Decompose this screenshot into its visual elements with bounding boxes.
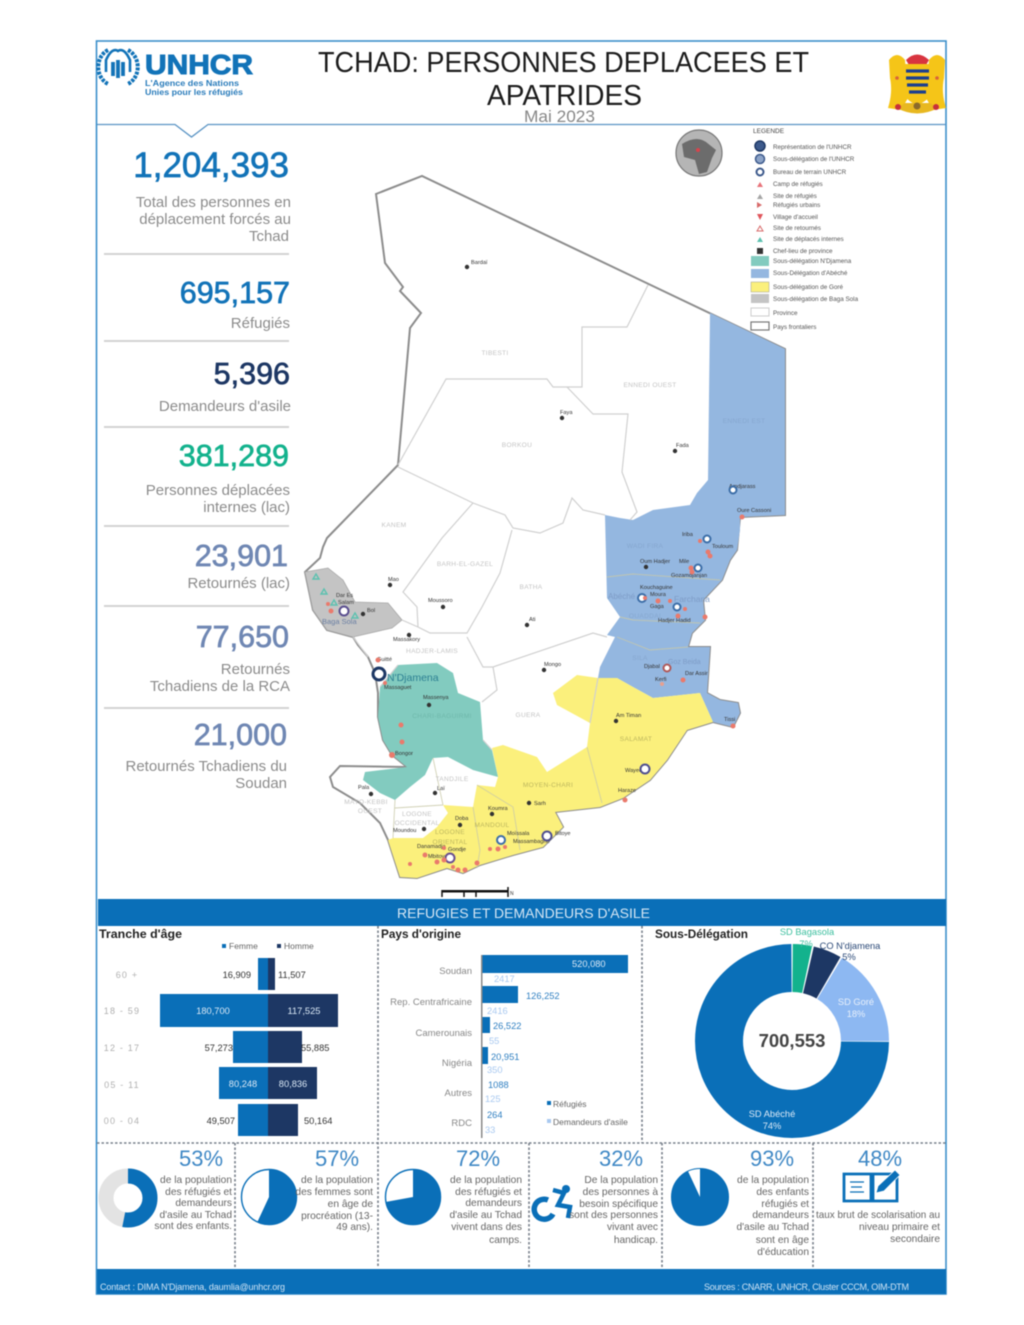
towns: Ati — [529, 617, 536, 623]
figure: refugees: Réfugiés — [231, 315, 290, 332]
text: camps: demandeurs — [465, 1198, 522, 1209]
origin labels: Camerounais — [416, 1028, 472, 1039]
figure: returnees CAR — [150, 620, 290, 695]
towns: Mao — [388, 577, 399, 583]
pyramid values: 16,909 — [223, 970, 251, 980]
text: camps: d'asile au Tchad — [449, 1210, 522, 1221]
pyramid bars: femme — [160, 958, 268, 1136]
origin values: 520,080 — [572, 959, 606, 969]
figure: returnees Sudan: 21,000 — [194, 718, 287, 752]
text: camps: des réfugiés et — [455, 1187, 522, 1198]
logo: UNHCR: UNHCR — [145, 49, 253, 80]
panel: key figures — [104, 146, 291, 792]
origin values: 26,522 — [493, 1021, 521, 1031]
figure: returnees CAR: Retournés — [221, 661, 290, 678]
origin values: 55 — [489, 1036, 499, 1046]
figure: returnees lake: 23,901 — [195, 539, 288, 573]
text: camps: de la population — [450, 1175, 522, 1186]
map of Chad — [305, 176, 785, 897]
legend labels: Sous-délégation N'Djamena — [773, 258, 852, 265]
region: Sous-délégation Baga Sola (grey) — [305, 568, 402, 637]
origin values — [485, 959, 606, 1135]
region labels: MAYO-KEBBI — [344, 799, 388, 806]
icon: book and pencil — [844, 1170, 900, 1201]
legend labels: Chef-lieu de province — [773, 248, 833, 255]
pyramid age labels — [104, 970, 140, 1126]
figure: IDPs: internes (lac) — [203, 499, 290, 516]
label: Goz Beida: Goz Beida — [668, 659, 701, 666]
donut labels: SD Bagasola — [780, 927, 835, 937]
origin labels — [390, 966, 473, 1129]
towns: Bol — [367, 608, 375, 614]
panel: disability — [534, 1146, 658, 1246]
text: children: des réfugiés et — [165, 1187, 232, 1198]
legend labels: Site de retournés — [773, 225, 821, 232]
towns: Tissi — [724, 717, 735, 723]
origin values: 33 — [485, 1125, 495, 1135]
origin labels: RDC — [451, 1118, 472, 1129]
towns: Hadjer Hadid — [658, 618, 691, 624]
region labels: ENNEDI OUEST — [623, 382, 677, 389]
legend labels: Sous-délégation de Baga Sola — [773, 296, 859, 303]
origin values: 264 — [487, 1110, 503, 1120]
title — [318, 47, 809, 112]
figure: returnees Sudan: Retournés Tchadiens du — [126, 758, 287, 775]
scale bar: N — [510, 891, 514, 897]
pyramid values: 49,507 — [207, 1116, 235, 1126]
origin labels: Autres — [445, 1088, 472, 1099]
pyramid values: 55,885 — [301, 1043, 329, 1053]
text: disability: De la population — [584, 1175, 658, 1186]
region: Sous-délégation N'Djamena (green) — [363, 663, 498, 800]
text: children: de la population — [160, 1175, 232, 1186]
figure: returnees Sudan: Soudan — [235, 775, 287, 792]
figure: returnees Sudan — [126, 718, 287, 792]
region labels: BATHA — [520, 584, 543, 591]
pyramid values: 180,700 — [196, 1006, 230, 1016]
region labels: BARH-EL-GAZEL — [437, 561, 493, 568]
contact: Contact : DIMA N'Djamena, daumlia@unhcr.org — [100, 1282, 285, 1292]
legend symbols — [751, 141, 769, 330]
date: Mai 2023 — [524, 108, 595, 126]
panel: school age — [672, 1146, 809, 1258]
towns: Gaga — [650, 604, 665, 610]
text: disability: des personnes à — [583, 1187, 658, 1198]
title: TCHAD: PERSONNES DEPLACEES ET — [318, 47, 809, 79]
legend labels: Représentation de l'UNHCR — [773, 144, 852, 151]
text: children: d'asile au Tchad — [159, 1210, 232, 1221]
text: children: sont des enfants. — [154, 1221, 232, 1232]
text: women: des femmes sont — [295, 1187, 373, 1198]
text: camps: vivent dans des — [451, 1222, 522, 1233]
label: Farchana: Farchana — [674, 594, 710, 604]
pyramid values: 57,273 — [205, 1043, 233, 1053]
towns: Laï — [437, 786, 445, 792]
header — [97, 47, 946, 137]
origin labels: Rep. Centrafricaine — [390, 997, 472, 1008]
origin legend: Réfugiés — [553, 1099, 587, 1109]
pyramid age labels: 60 + — [116, 970, 138, 980]
chart: country of origin — [381, 929, 628, 1138]
origin values: 125 — [485, 1094, 501, 1104]
text: enrolment: niveau primaire et — [859, 1222, 940, 1233]
icon: coat of arms of Chad — [888, 54, 946, 114]
origin labels: Nigéria — [442, 1058, 473, 1069]
text: women: procréation (13- — [301, 1211, 373, 1222]
towns: Danamadja — [417, 844, 446, 850]
pyramid values: 80,248 — [229, 1079, 257, 1089]
region: Sous-délégation d'Abéché (blue) — [598, 313, 785, 727]
region labels: SALAMAT — [620, 736, 652, 743]
towns: Am Timan — [616, 713, 641, 719]
origin labels: Soudan — [439, 966, 472, 977]
figure: IDPs: 381,289 — [179, 439, 289, 473]
towns: Sarh — [534, 801, 546, 807]
region labels: ENNEDI EST — [723, 418, 765, 425]
towns: Massaguet — [384, 685, 412, 691]
origin legend: Demandeurs d'asile — [553, 1117, 628, 1127]
legend: LEGENDE — [753, 128, 785, 135]
towns: Faya — [560, 410, 573, 416]
donut total: 700,553 — [759, 1030, 825, 1051]
towns: Moïssala — [507, 831, 530, 837]
towns: Dar Es — [336, 593, 353, 599]
figure: total: Total des personnes en — [136, 194, 291, 211]
pyramid age labels: 12 - 17 — [104, 1043, 140, 1053]
icon: pie 72% — [386, 1169, 441, 1225]
towns: Oure Cassoni — [737, 508, 771, 514]
towns: Moussoro — [428, 598, 453, 604]
towns: Djabal — [644, 664, 660, 670]
donut labels: 74% — [763, 1121, 781, 1131]
footer — [97, 1269, 946, 1294]
logo: UNHCR: Unies pour les réfugiés — [145, 87, 243, 97]
text: school age: de la population — [737, 1175, 809, 1186]
pyramid values: 117,525 — [288, 1006, 320, 1016]
figure: returnees CAR: Tchadiens de la RCA — [150, 678, 290, 695]
towns: Massambagne — [513, 839, 550, 845]
region labels: SILA — [632, 655, 648, 662]
towns: Bongor — [395, 751, 413, 757]
text: school age: d'éducation — [757, 1247, 809, 1258]
icon: pie 57% — [242, 1169, 297, 1225]
figure: asylum seekers: 5,396 — [214, 357, 290, 391]
towns: Wayed — [625, 768, 642, 774]
region labels: BORKOU — [502, 442, 532, 449]
panel: women of reproductive age — [242, 1146, 373, 1233]
towns: Doba — [455, 816, 469, 822]
panel: disability: 32% — [599, 1146, 643, 1171]
legend labels: Réfugiés urbains — [773, 202, 820, 209]
pyramid values: 80,836 — [279, 1079, 307, 1089]
towns: Pala — [358, 785, 370, 791]
text: school age: d'asile au Tchad — [736, 1222, 809, 1233]
figure: returnees CAR: 77,650 — [196, 620, 289, 654]
donut labels: SD Abéché — [749, 1109, 795, 1119]
text: disability: vivant avec — [607, 1222, 658, 1233]
text: disability: handicap. — [614, 1235, 658, 1246]
region labels: TIBESTI — [481, 350, 509, 357]
towns: Bitoye — [555, 831, 571, 837]
towns: Moura — [650, 592, 667, 598]
donut labels: CO N'djamena — [820, 941, 881, 951]
section band: REFUGIES ET DEMANDEURS D'ASILE — [397, 906, 650, 921]
region: Sous-délégation de Goré (yellow) — [388, 675, 713, 878]
text: women: 49 ans). — [336, 1222, 373, 1233]
figure: IDPs — [146, 439, 290, 516]
figure: returnees lake — [187, 539, 290, 592]
figure: asylum seekers — [159, 357, 291, 415]
towns: Kerfi — [655, 677, 667, 683]
text: disability: sont des personnes — [569, 1210, 658, 1221]
region labels: WADI FIRA — [627, 543, 664, 550]
origin legend — [547, 1099, 628, 1127]
text: enrolment — [816, 1210, 940, 1245]
panel: women of reproductive age: 57% — [315, 1146, 359, 1171]
page frame — [96, 41, 946, 1294]
inset: locator globe — [676, 130, 722, 176]
region labels: OUADDAI — [629, 613, 661, 620]
figure: refugees — [180, 276, 290, 332]
region labels: LOGONE — [402, 811, 432, 818]
towns: Massakory — [393, 637, 420, 643]
text: enrolment: secondaire — [890, 1234, 940, 1245]
region labels: TANDJILE — [435, 776, 469, 783]
text: disability — [569, 1175, 658, 1246]
donut labels: SD Goré — [838, 997, 874, 1007]
pyramid legend: Femme — [229, 941, 258, 951]
title: APATRIDES — [487, 80, 642, 112]
chart: age pyramid — [99, 929, 338, 1136]
panel: living in camps — [386, 1146, 522, 1246]
label: Abéché office: Abéché — [608, 592, 636, 601]
country base — [305, 176, 785, 878]
region labels: GUERA — [516, 712, 541, 719]
figure: total: Tchad — [249, 228, 289, 245]
pyramid values: 50,164 — [304, 1116, 332, 1126]
origin values: 350 — [487, 1065, 503, 1075]
figure: returnees lake: Retournés (lac) — [187, 575, 290, 592]
legend — [751, 128, 859, 331]
panel: school age: 93% — [750, 1146, 794, 1171]
text: school age: sont en âge — [756, 1235, 809, 1246]
origin values: 2416 — [487, 1006, 508, 1016]
text: school age: des enfants — [756, 1187, 809, 1198]
region labels: MANDOUL — [474, 822, 510, 829]
text: women: de la population — [301, 1175, 373, 1186]
legend labels: Sous-Délégation d'Abéché — [773, 270, 848, 277]
legend labels: Site de déplacés internes — [773, 236, 844, 243]
panel: children — [106, 1146, 232, 1232]
towns: Dar Assir — [685, 671, 708, 677]
towns: Amdjarass — [729, 484, 756, 490]
origin values: 20,951 — [491, 1052, 519, 1062]
donut labels: 5% — [842, 952, 856, 962]
text: disability: besoin spécifique — [579, 1199, 658, 1210]
donut labels — [749, 927, 881, 1131]
towns: Touloum — [712, 544, 733, 550]
legend labels: Pays frontaliers — [773, 324, 816, 331]
towns: Mbitoye — [428, 854, 448, 860]
text: school age: réfugiés et — [761, 1199, 809, 1210]
towns: Bardaï — [471, 260, 488, 266]
towns: Koumra — [488, 806, 508, 812]
panel: children: 53% — [179, 1146, 223, 1171]
donut ring — [719, 968, 865, 1114]
towns: Oum Hadjer — [640, 559, 670, 565]
region labels — [344, 350, 765, 846]
legend labels: Site de réfugiés — [773, 193, 817, 200]
logo: UNHCR — [98, 49, 253, 97]
towns: Gozamdjanjan — [671, 573, 707, 579]
text: children: demandeurs — [175, 1198, 232, 1209]
text: school age — [736, 1175, 809, 1258]
origin values: 1088 — [488, 1080, 509, 1090]
figure: total: 1,204,393 — [133, 146, 289, 185]
text: camps — [449, 1175, 522, 1246]
sources: Sources : CNARR, UNHCR, Cluster CCCM, OIM-DTM — [704, 1282, 909, 1292]
donut labels: 18% — [847, 1009, 865, 1019]
donut labels: 7% — [799, 939, 813, 949]
legend labels — [773, 144, 859, 331]
towns: Gondje — [448, 847, 466, 853]
icon: pie 93% — [672, 1168, 729, 1226]
legend labels: Sous-délégation de Goré — [773, 284, 844, 291]
legend labels: Sous-délégation de l'UNHCR — [773, 156, 855, 163]
region labels: CHARI-BAGUIRMI — [412, 713, 472, 720]
towns: Massenya — [423, 695, 449, 701]
pyramid legend: Homme — [284, 941, 314, 951]
text: camps: camps. — [489, 1235, 522, 1246]
chart: age pyramid: Tranche d'âge — [99, 929, 182, 941]
pyramid values — [196, 970, 332, 1126]
region labels: MOYEN-CHARI — [523, 782, 573, 789]
towns: Salam — [338, 600, 354, 606]
icon: UNHCR emblem — [98, 50, 138, 84]
towns: Mile — [679, 559, 689, 565]
pyramid values: 11,507 — [278, 970, 306, 980]
icon: donut 53% — [106, 1176, 150, 1220]
text: women — [295, 1175, 373, 1233]
town label: N'Djamena: N'Djamena — [387, 672, 439, 684]
towns: Fada — [676, 443, 690, 449]
towns: Iriba — [682, 532, 694, 538]
figure: asylum seekers: Demandeurs d'asile — [159, 398, 291, 415]
origin bars — [481, 955, 628, 1138]
refugee sites — [326, 514, 744, 872]
panel: living in camps: 72% — [456, 1146, 500, 1171]
legend labels: Village d'accueil — [773, 214, 818, 221]
region labels: ORIENTAL — [433, 839, 467, 846]
towns: Kouchaguine — [640, 585, 673, 591]
legend labels: Province — [773, 310, 798, 317]
chart: sub-delegation donut: Sous-Délégation — [655, 929, 748, 941]
origin values: 2417 — [494, 974, 515, 984]
figure: IDPs: Personnes déplacées — [146, 482, 290, 499]
text: women: en âge de — [328, 1199, 373, 1210]
pyramid age labels: 18 - 59 — [104, 1006, 140, 1016]
towns: Mongo — [544, 662, 561, 668]
label: Baga Sola: Baga Sola — [322, 617, 357, 626]
legend labels: Camp de réfugiés — [773, 181, 823, 188]
figure: refugees: 695,157 — [180, 276, 290, 310]
header rule with chevron — [97, 124, 946, 137]
figure: total — [133, 146, 291, 245]
icon: wheelchair — [534, 1185, 570, 1219]
region labels: HADJER-LAMIS — [406, 648, 458, 655]
panel: enrolment — [816, 1146, 940, 1245]
panel: enrolment: 48% — [858, 1146, 902, 1171]
region labels: OCCIDENTAL — [394, 820, 440, 827]
region labels: OUEST — [358, 808, 382, 815]
pyramid bars: homme — [268, 958, 338, 1136]
text: children — [154, 1175, 232, 1232]
chart: sub-delegation donut — [655, 927, 881, 1131]
scale bar — [442, 887, 514, 897]
towns: Guitté — [377, 657, 392, 663]
region labels: LOGONE — [435, 829, 465, 836]
towns: Haraze — [618, 788, 636, 794]
pyramid age labels: 00 - 04 — [104, 1116, 140, 1126]
legend labels: Bureau de terrain UNHCR — [773, 169, 847, 176]
towns: Moundou — [393, 828, 416, 834]
pyramid legend — [222, 941, 314, 951]
IDP sites — [313, 574, 358, 618]
origin values: 126,252 — [526, 991, 560, 1001]
pyramid age labels: 05 - 11 — [104, 1080, 140, 1090]
offices — [340, 486, 736, 862]
text: school age: demandeurs — [752, 1210, 809, 1221]
chart: country of origin: Pays d'origine — [381, 929, 461, 941]
region labels: KANEM — [382, 522, 406, 529]
text: enrolment: taux brut de scolarisation au — [816, 1210, 940, 1221]
section band — [98, 899, 946, 926]
logo: UNHCR: L'Agence des Nations — [145, 78, 239, 88]
towns — [336, 260, 771, 860]
figure: total: déplacement forcés au — [139, 211, 291, 228]
